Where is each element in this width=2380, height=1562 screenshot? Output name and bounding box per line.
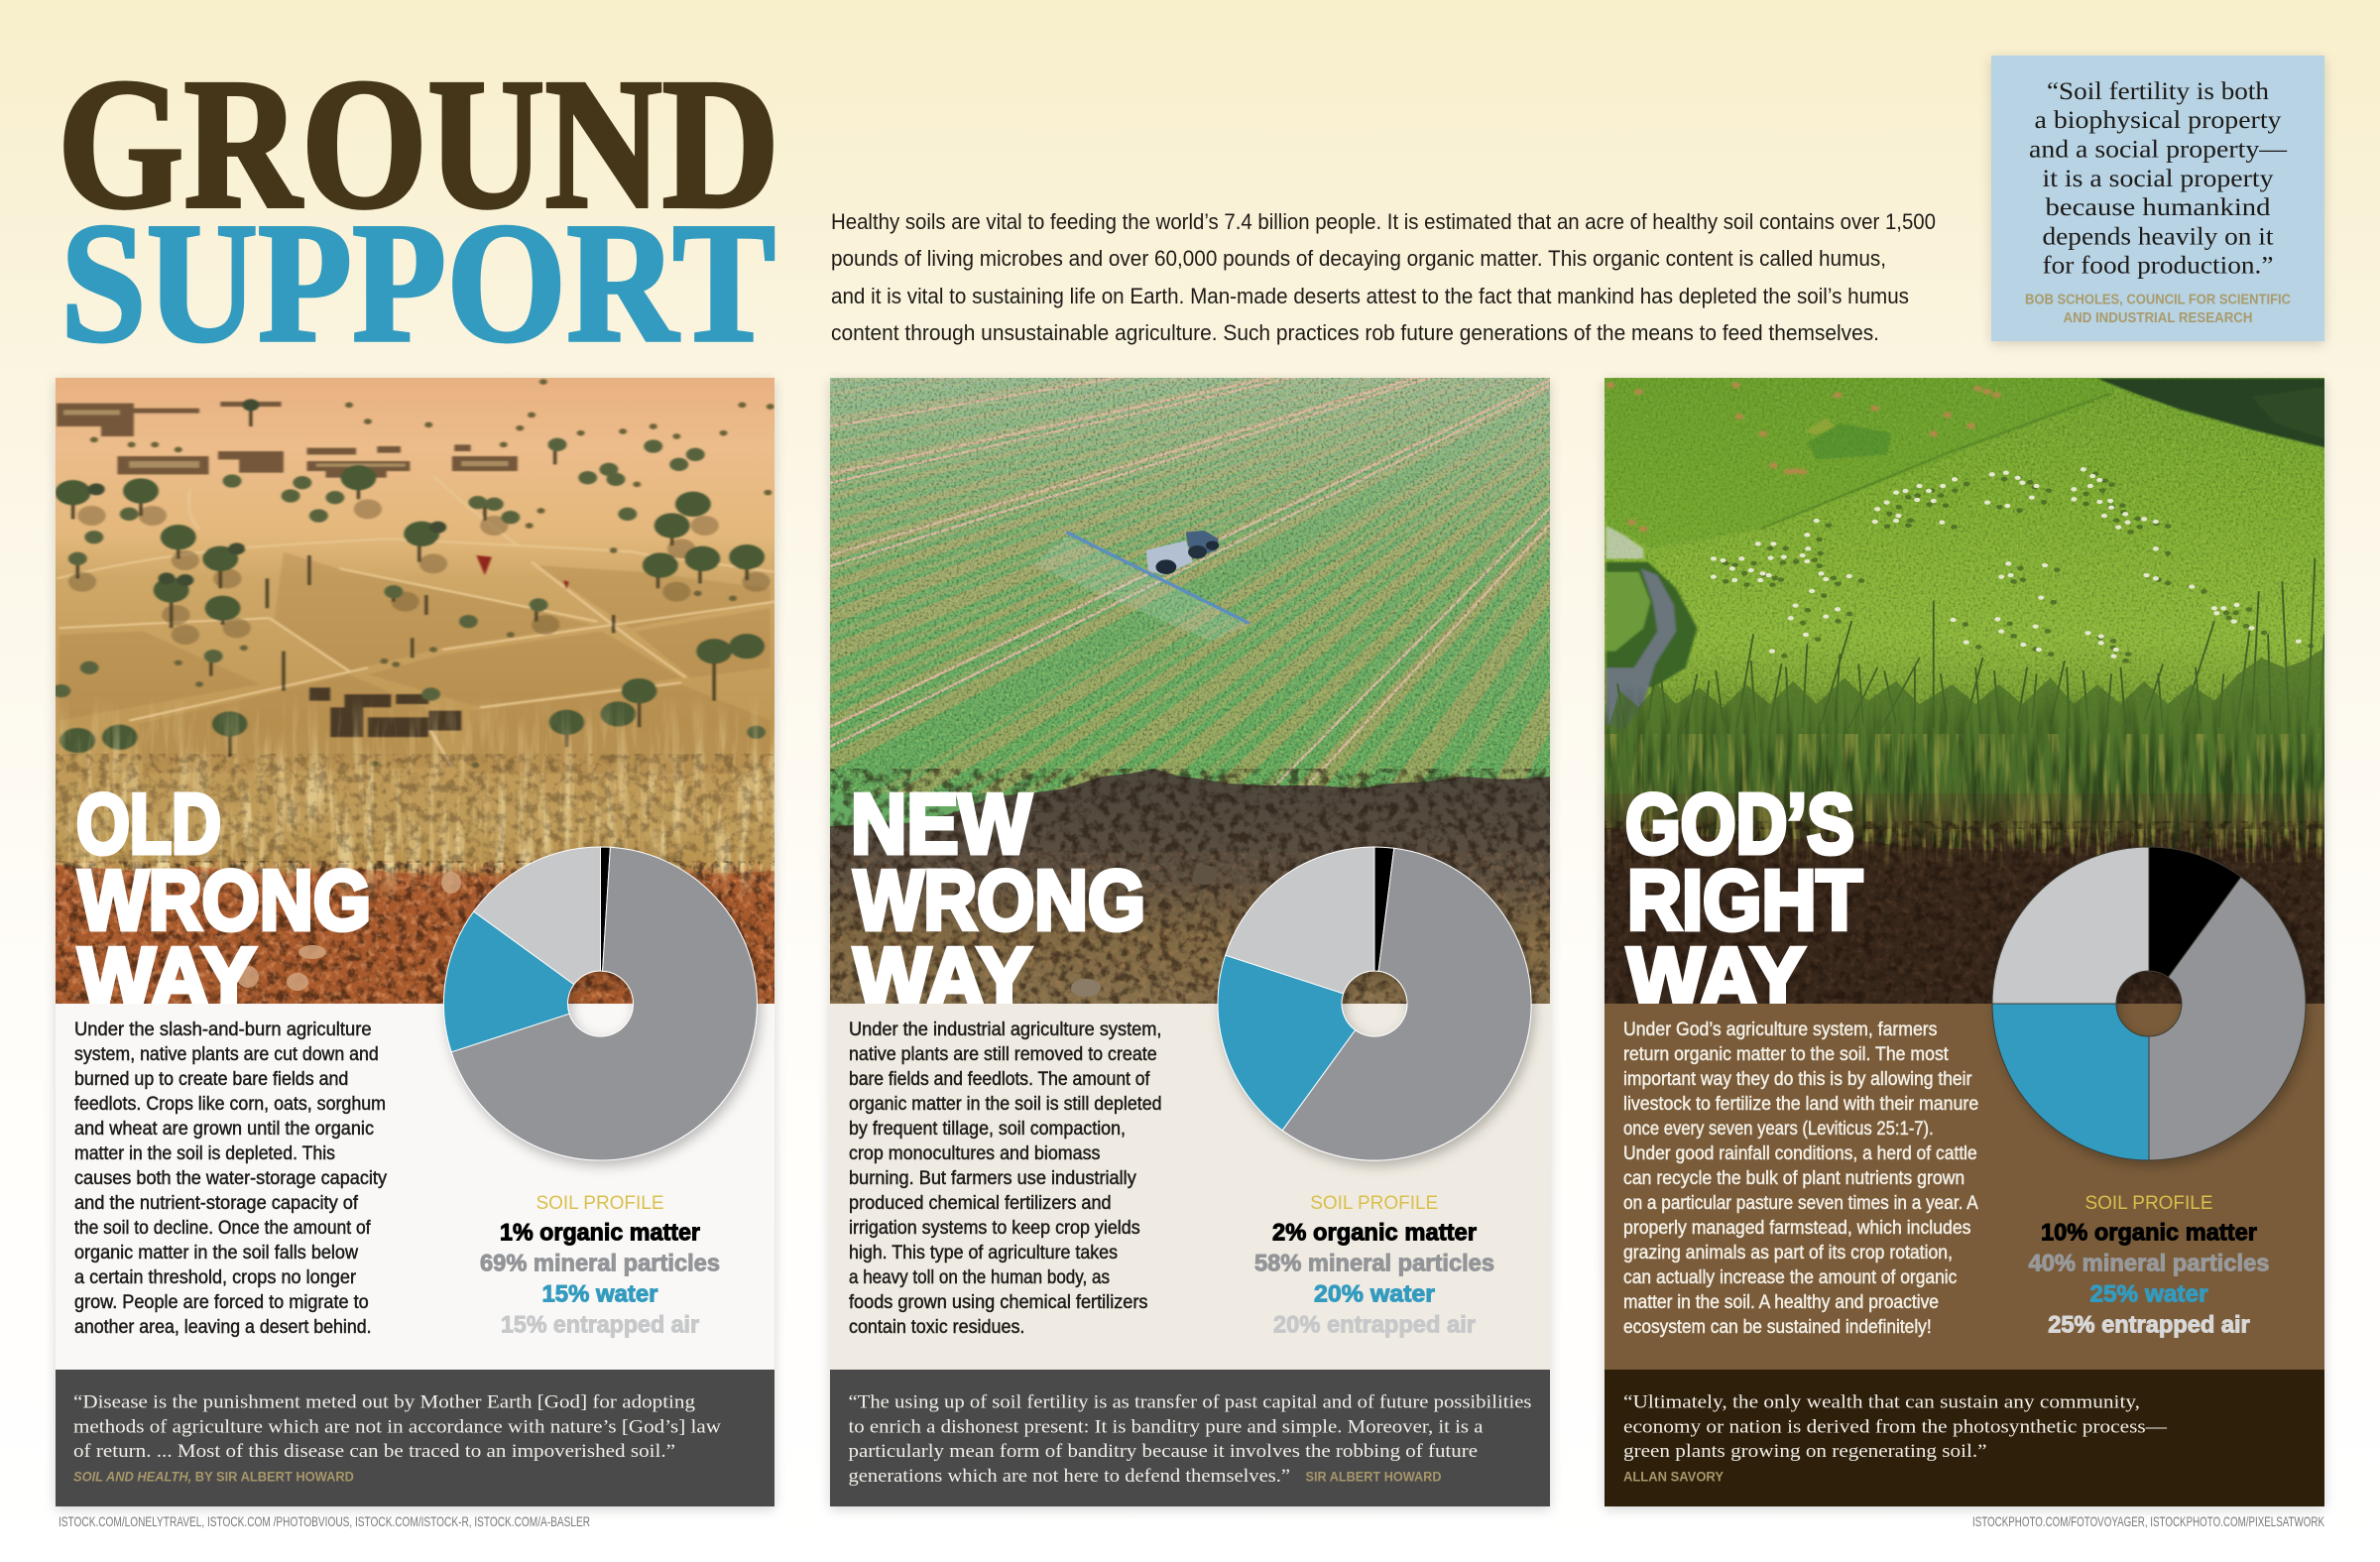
soil profile legend: SOIL PROFILE xyxy=(1310,1193,1438,1214)
soil profile legend: 58% mineral particles xyxy=(1254,1250,1494,1277)
intro text: and it is vital to sustaining life on Earth. Man-made deserts attest to the fact that mankind has depleted the soil’s humus xyxy=(831,284,1909,308)
soil profile legend xyxy=(480,1193,720,1339)
soil profile legend: 40% mineral particles xyxy=(2029,1250,2269,1277)
quote bar: “Ultimately, the only wealth that can sustain any community, xyxy=(1623,1392,2140,1412)
text panel background xyxy=(1605,1004,2324,1370)
body text: return organic matter to the soil. The most xyxy=(1623,1044,1949,1065)
body text: and the nutrient-storage capacity of xyxy=(74,1193,359,1214)
body text xyxy=(74,1020,387,1338)
body text: feedlots. Crops like corn, oats, sorghum xyxy=(74,1094,386,1115)
body text: contain toxic residues. xyxy=(849,1317,1024,1338)
quote bar: of return. ... Most of this disease can be traced to an impoverished soil.” xyxy=(73,1441,675,1462)
soil profile legend: 15% water xyxy=(541,1281,658,1307)
pull quote: Bob Scholes: BOB SCHOLES, COUNCIL FOR SCIENTIFIC xyxy=(2025,292,2291,307)
body text: foods grown using chemical fertilizers xyxy=(849,1292,1148,1313)
body text: livestock to fertilize the land with their manure xyxy=(1623,1094,1978,1115)
panel: new wrong way xyxy=(825,376,1555,1514)
quote bar: methods of agriculture which are not in accordance with nature’s [God’s] law xyxy=(73,1416,721,1438)
quote bar: “The using up of soil fertility is as transfer of past capital and of future possibilities xyxy=(849,1392,1531,1412)
donut chart: 1/69/15/15 xyxy=(443,847,757,1160)
body text: system, native plants are cut down and xyxy=(74,1044,379,1065)
title: SUPPORT xyxy=(60,188,775,378)
pull quote: Bob Scholes: and a social property— xyxy=(2029,137,2288,163)
donut chart: 10/40/25/25 xyxy=(1992,847,2306,1160)
body text: Under the industrial agriculture system, xyxy=(849,1020,1162,1040)
soil profile legend xyxy=(2029,1193,2269,1339)
heading: NEW xyxy=(851,778,1032,872)
soil profile legend: 20% water xyxy=(1314,1281,1435,1307)
photo: savanna farmland and red soil xyxy=(56,378,774,1004)
pull quote: Bob Scholes: it is a social property xyxy=(2043,166,2274,192)
soil profile legend: 25% entrapped air xyxy=(2048,1311,2250,1339)
body text: organic matter in the soil falls below xyxy=(74,1243,358,1263)
photo credits left: ISTOCK.COM/LONELYTRAVEL, ISTOCK.COM /PHOTOBVIOUS, ISTOCK.COM/ISTOCK-R, ISTOCK.COM/A-BASLER xyxy=(59,1513,590,1529)
quote bar: generations which are not here to defend themselves.” xyxy=(849,1466,1290,1487)
pull quote: Bob Scholes: a biophysical property xyxy=(2035,107,2282,134)
body text: properly managed farmstead, which includes xyxy=(1623,1218,1971,1239)
quote bar: economy or nation is derived from the photosynthetic process— xyxy=(1623,1416,2168,1438)
body text: a certain threshold, crops no longer xyxy=(74,1267,357,1288)
body text: on a particular pasture seven times in a year. A xyxy=(1623,1193,1978,1214)
body text: once every seven years (Leviticus 25:1-7). xyxy=(1623,1119,1934,1140)
pull quote: Bob Scholes: “Soil fertility is both xyxy=(2047,78,2270,105)
quote bar xyxy=(56,1370,774,1506)
body text: another area, leaving a desert behind. xyxy=(74,1317,372,1338)
soil profile legend: 10% organic matter xyxy=(2041,1220,2257,1246)
text panel background xyxy=(56,1004,774,1370)
body text: burning. But farmers use industrially xyxy=(849,1168,1136,1189)
quote bar: “Disease is the punishment meted out by Mother Earth [God] for adopting xyxy=(73,1392,696,1412)
soil profile legend: 25% water xyxy=(2090,1281,2208,1307)
body text: native plants are still removed to create xyxy=(849,1044,1157,1065)
quote bar: to enrich a dishonest present: It is banditry pure and simple. Moreover, it is a xyxy=(849,1416,1484,1438)
heading xyxy=(75,791,369,1004)
soil profile legend: SOIL PROFILE xyxy=(2084,1193,2213,1214)
intro text xyxy=(831,209,1936,345)
quote bar: SOIL AND HEALTH, BY SIR ALBERT HOWARD xyxy=(73,1470,354,1484)
body text: Under God’s agriculture system, farmers xyxy=(1623,1020,1938,1040)
soil profile legend xyxy=(1254,1193,1494,1339)
body text: irrigation systems to keep crop yields xyxy=(849,1218,1140,1239)
heading: WAY xyxy=(1627,931,1805,1025)
panel: god's right way xyxy=(1605,378,2326,1506)
body text: produced chemical fertilizers and xyxy=(849,1193,1112,1214)
intro text: pounds of living microbes and over 60,000 pounds of decaying organic matter. This organic content is called humus, xyxy=(831,246,1886,271)
body text: bare fields and feedlots. The amount of xyxy=(849,1069,1150,1090)
pull quote: Bob Scholes: for food production.” xyxy=(2043,252,2273,280)
panel: old wrong way xyxy=(56,378,774,1506)
pull quote: Bob Scholes: depends heavily on it xyxy=(2043,224,2274,250)
text panel background xyxy=(830,1004,1550,1370)
body text: matter in the soil is depleted. This xyxy=(74,1143,335,1164)
body text: the soil to decline. Once the amount of xyxy=(74,1218,371,1239)
quote bar: particularly mean form of banditry because it involves the robbing of future xyxy=(849,1441,1478,1462)
donut chart: 2/58/20/20 xyxy=(1218,847,1531,1160)
body text: high. This type of agriculture takes xyxy=(849,1243,1118,1263)
soil profile legend: 1% organic matter xyxy=(500,1220,700,1246)
soil profile legend: 2% organic matter xyxy=(1272,1220,1477,1246)
body text: and wheat are grown until the organic xyxy=(74,1119,374,1140)
heading: WAY xyxy=(854,931,1031,1025)
body text: grow. People are forced to migrate to xyxy=(74,1292,369,1313)
heading: GOD’S xyxy=(1625,778,1854,872)
photo: sheep on green pasture and dark soil xyxy=(1605,378,2326,1004)
intro text: content through unsustainable agriculture. Such practices rob future generations of the means to feed themselves. xyxy=(831,320,1879,345)
body text: burned up to create bare fields and xyxy=(74,1069,348,1090)
heading: WAY xyxy=(78,931,256,1025)
quote bar: green plants growing on regenerating soil.” xyxy=(1623,1441,1987,1462)
body text xyxy=(849,1020,1162,1338)
body text: grazing animals as part of its crop rotation, xyxy=(1623,1243,1953,1263)
quote bar: ALLAN SAVORY xyxy=(1623,1470,1724,1484)
soil profile legend: 15% entrapped air xyxy=(501,1311,699,1339)
quote bar xyxy=(1605,1370,2324,1506)
quote bar xyxy=(830,1370,1550,1506)
body text: by frequent tillage, soil compaction, xyxy=(849,1119,1126,1140)
heading: WRONG xyxy=(78,854,371,948)
soil profile legend: 69% mineral particles xyxy=(480,1250,720,1277)
body text: can recycle the bulk of plant nutrients grown xyxy=(1623,1168,1964,1189)
body text: matter in the soil. A healthy and proactive xyxy=(1623,1292,1939,1313)
intro text: Healthy soils are vital to feeding the world’s 7.4 billion people. It is estimated that an acre of healthy soil contains over 1,500 xyxy=(831,209,1936,234)
soil profile legend: SOIL PROFILE xyxy=(536,1193,664,1214)
body text: causes both the water-storage capacity xyxy=(74,1168,387,1189)
heading: WRONG xyxy=(854,854,1145,948)
title: GROUND xyxy=(58,40,779,247)
body text: can actually increase the amount of organic xyxy=(1623,1267,1957,1288)
heading xyxy=(851,791,1143,1004)
quote bar: SIR ALBERT HOWARD xyxy=(1305,1470,1442,1484)
body text: Under the slash-and-burn agriculture xyxy=(74,1020,372,1040)
body text: ecosystem can be sustained indefinitely! xyxy=(1623,1317,1932,1338)
soil profile legend: 20% entrapped air xyxy=(1273,1311,1476,1339)
body text: crop monocultures and biomass xyxy=(849,1143,1101,1164)
body text: a heavy toll on the human body, as xyxy=(849,1267,1110,1288)
heading xyxy=(1624,791,1864,1004)
body text: important way they do this is by allowing their xyxy=(1623,1069,1972,1090)
pull quote: Bob Scholes xyxy=(1991,56,2324,341)
body text: Under good rainfall conditions, a herd of cattle xyxy=(1623,1143,1977,1164)
title xyxy=(58,40,779,378)
pull quote: Bob Scholes: AND INDUSTRIAL RESEARCH xyxy=(2063,310,2253,326)
photo: sprayed crop field and depleted soil xyxy=(830,378,1550,1004)
pull quote: Bob Scholes: because humankind xyxy=(2045,194,2271,221)
body text: organic matter in the soil is still depleted xyxy=(849,1094,1162,1115)
heading: RIGHT xyxy=(1627,854,1862,948)
heading: OLD xyxy=(76,778,221,872)
body text xyxy=(1623,1020,1978,1338)
